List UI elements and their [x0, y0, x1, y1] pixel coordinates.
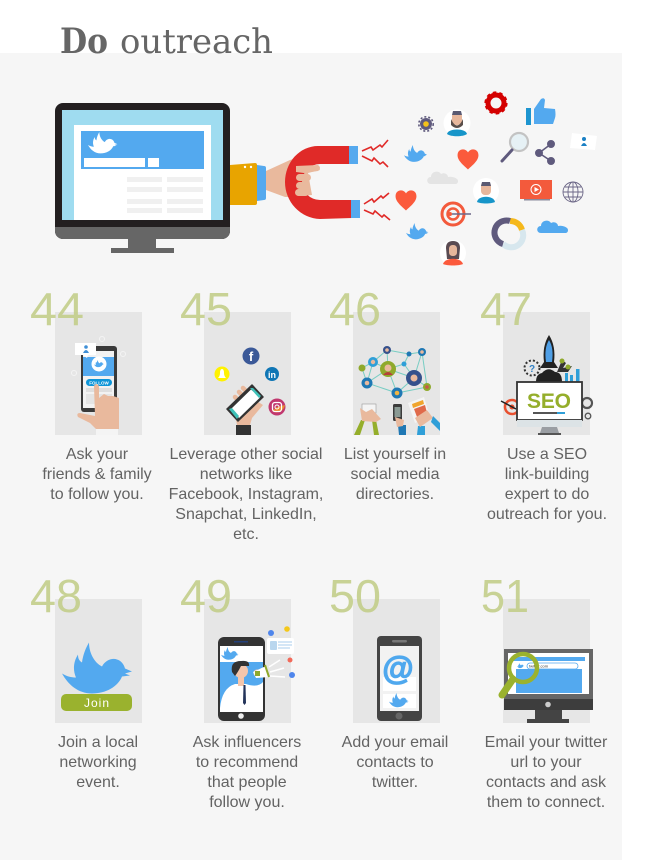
description: to recommend — [196, 754, 298, 771]
description — [58, 734, 138, 791]
description: expert to do — [505, 486, 589, 503]
icon: magnetic sparks — [362, 140, 390, 220]
description — [193, 734, 301, 811]
icon: social media cloud — [396, 93, 597, 266]
description: follow you. — [209, 794, 285, 811]
description: contacts and ask — [486, 774, 607, 791]
description: twitter. — [372, 774, 418, 791]
description — [342, 734, 448, 791]
description: etc. — [233, 526, 259, 543]
description: Use a SEO — [507, 446, 587, 463]
description: outreach for you. — [487, 506, 607, 523]
description: to follow you. — [50, 486, 144, 503]
icon: SEO monitor with rocket: SEO — [527, 390, 571, 413]
panel: tip 47 — [480, 283, 607, 523]
icon: phone with email symbol: @ — [382, 650, 414, 686]
panel: tip 44 — [30, 283, 152, 503]
illustration background — [353, 599, 440, 723]
icon: twitter bird with join button — [61, 642, 132, 711]
icon: desktop monitor with twitter page — [55, 103, 230, 253]
icon: monitor with magnifier on twitter url — [502, 649, 593, 723]
description: friends & family — [42, 466, 152, 483]
description: networking — [59, 754, 137, 771]
title: Do — [60, 21, 108, 62]
title: outreach — [120, 22, 273, 62]
icon: SEO monitor with rocket — [501, 335, 592, 435]
icon: SEO monitor with rocket: ? — [529, 364, 535, 375]
description: Ask your — [66, 446, 129, 463]
description — [344, 446, 446, 503]
number 44: 44 — [30, 283, 84, 335]
illustration background — [55, 312, 142, 435]
description: contacts to — [356, 754, 434, 771]
icon: hand tapping follow on phone: FOLLOW — [89, 380, 109, 386]
description: Ask influencers — [193, 734, 301, 751]
illustration background — [503, 599, 590, 723]
number 48: 48 — [30, 570, 82, 622]
description: event. — [76, 774, 120, 791]
number 51: 51 — [481, 570, 529, 622]
icon: hand tapping follow on phone — [72, 336, 126, 435]
illustration background — [204, 312, 291, 435]
number 46: 46 — [329, 283, 381, 335]
icon: hand with phone and social logos: f — [249, 349, 254, 364]
panel: tip 50 — [329, 570, 448, 791]
icon: phone with email symbol — [377, 636, 422, 721]
description — [169, 446, 323, 543]
description: url to your — [510, 754, 582, 771]
illustration background — [204, 599, 291, 723]
description — [487, 446, 607, 523]
panel: tip 49 — [180, 570, 301, 811]
description: directories. — [356, 486, 434, 503]
panel: tip 45 — [169, 283, 323, 543]
number 50: 50 — [329, 570, 381, 622]
number 49: 49 — [180, 570, 232, 622]
description: Join a local — [58, 734, 138, 751]
description: Add your email — [342, 734, 448, 751]
panel: tip 46 — [329, 283, 446, 503]
description: social media — [351, 466, 440, 483]
icon: twitter bird with join button: Join — [84, 696, 110, 710]
description — [485, 734, 608, 811]
illustration background — [503, 312, 590, 435]
title — [60, 21, 273, 62]
description: Email your twitter — [485, 734, 608, 751]
icon: hand with phone and social logos: in — [268, 370, 276, 380]
description: Facebook, Instagram, — [169, 486, 323, 503]
icon: social network and hands — [354, 346, 440, 435]
description: networks like — [200, 466, 292, 483]
icon: monitor with magnifier on twitter url: twitter.com — [529, 664, 549, 668]
icon: influencer with megaphone on phone — [218, 626, 295, 721]
illustration background — [55, 599, 142, 723]
number 47: 47 — [480, 283, 532, 335]
icon: arm holding magnet — [230, 146, 360, 219]
illustration background — [353, 312, 440, 435]
description: Leverage other social — [170, 446, 322, 463]
description: List yourself in — [344, 446, 446, 463]
description: Snapchat, LinkedIn, — [175, 506, 317, 523]
panel: tip 48 — [30, 570, 142, 791]
panel: tip 51 — [481, 570, 608, 811]
description: them to connect. — [487, 794, 605, 811]
number 45: 45 — [180, 283, 232, 335]
description: that people — [207, 774, 287, 791]
hero illustration: monitor with magnet attracting social icons — [55, 93, 597, 266]
icon: hand with phone and social logos — [214, 348, 286, 435]
description: link-building — [505, 466, 589, 483]
description — [42, 446, 152, 503]
